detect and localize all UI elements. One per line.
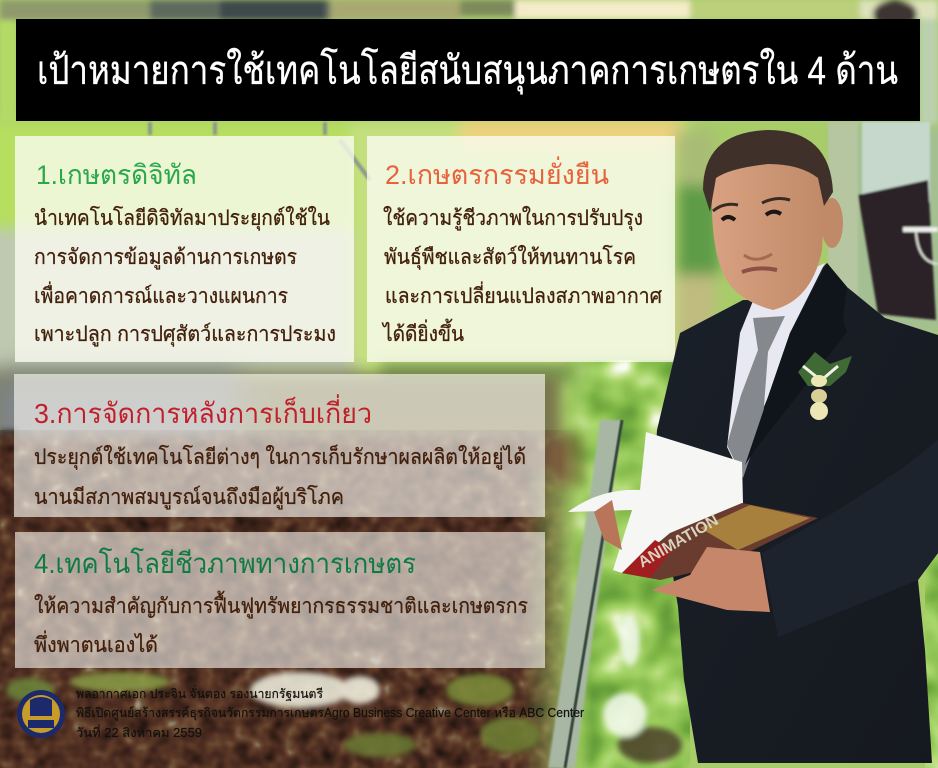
body text 3: นานมีสภาพสมบูรณ์จนถึงมือผู้บริโภค	[34, 485, 344, 510]
background farmer	[828, 122, 938, 320]
body text 2: พันธุ์พืชและสัตว์ให้ทนทานโรค	[384, 245, 636, 270]
body text 3: ประยุกต์ใช้เทคโนโลยีต่างๆ ในการเก็บรักษาผลผลิตให้อยู่ได้	[34, 443, 526, 470]
caption	[76, 685, 584, 740]
panel 2: sustainable agriculture	[367, 136, 675, 362]
body text 2: ได้ดียิ่งขึ้น	[381, 319, 464, 346]
title bar	[16, 19, 920, 121]
body text 1	[34, 206, 336, 347]
body text 3	[34, 443, 526, 510]
body text 1: การจัดการข้อมูลด้านการเกษตร	[34, 246, 297, 270]
body text 4: ให้ความสำคัญกับการฟื้นฟูทรัพยากรธรรมชาติและเกษตรกร	[34, 591, 528, 619]
nose	[744, 254, 772, 259]
caption: วันที่ 22 สิงหาคม 2559	[76, 724, 202, 740]
heading 3: 3.การจัดการหลังการเก็บเกี่ยว	[34, 394, 372, 429]
ear	[821, 198, 843, 248]
upper lettuce bed tone	[0, 375, 560, 465]
body text 2: และการเปลี่ยนแปลงสภาพอากาศ	[385, 281, 663, 308]
eyes	[722, 212, 781, 220]
right hand	[652, 547, 770, 612]
sleeve	[762, 440, 938, 637]
bright foliage	[560, 360, 690, 768]
title on cover: ANIMATION	[636, 512, 721, 571]
boutonniere	[798, 352, 852, 420]
body text 4: พึ่งพาตนเองได้	[34, 630, 158, 657]
caption: พลอากาศเอก ประจิน จั่นตอง รองนายกรัฐมนตรี	[76, 685, 323, 701]
irrigation channel	[548, 420, 622, 768]
lapel	[745, 263, 847, 465]
book pages	[568, 432, 743, 573]
hair	[703, 130, 833, 212]
heading 2: 2.เกษตรกรรมยั่งยืน	[385, 156, 609, 190]
footer credit	[17, 685, 584, 740]
body text 1: นำเทคโนโลยีดิจิทัลมาประยุกต์ใช้ใน	[34, 206, 330, 231]
body text 2: ใช้ความรู้ชีวภาพในการปรับปรุง	[383, 206, 643, 231]
mouth	[742, 268, 777, 272]
jacket	[654, 263, 938, 763]
body text 4	[34, 591, 528, 657]
necktie	[727, 316, 785, 478]
body text 2	[381, 206, 663, 346]
book cover	[622, 503, 818, 580]
body text 1: เพื่อคาดการณ์และวางแผนการ	[34, 281, 288, 308]
panel 1: digital agriculture	[15, 136, 354, 362]
brows	[713, 199, 790, 211]
heading 4: 4.เทคโนโลยีชีวภาพทางการเกษตร	[34, 547, 416, 579]
top strip photo	[0, 0, 938, 125]
panel 3: post-harvest management	[14, 374, 545, 517]
head	[703, 130, 843, 310]
shirt	[727, 263, 825, 470]
machine frame behind panel 1	[150, 122, 370, 180]
heading 1: 1.เกษตรดิจิทัล	[36, 160, 197, 190]
brown patch beside panel 3	[545, 434, 605, 486]
emblem	[17, 690, 65, 738]
lettuce beds	[0, 420, 580, 768]
left hand	[594, 500, 622, 550]
photo: man in suit holding book	[568, 130, 938, 763]
body text 1: เพาะปลูก การปศุสัตว์และการประมง	[34, 322, 336, 347]
caption: พิธีเปิดศูนย์สร้างสรรค์ธุรกิจนวัตกรรมการเกษตรAgro Business Creative Center หรือ ABC Center	[76, 706, 584, 721]
panel 4: agricultural biotechnology	[15, 532, 545, 668]
